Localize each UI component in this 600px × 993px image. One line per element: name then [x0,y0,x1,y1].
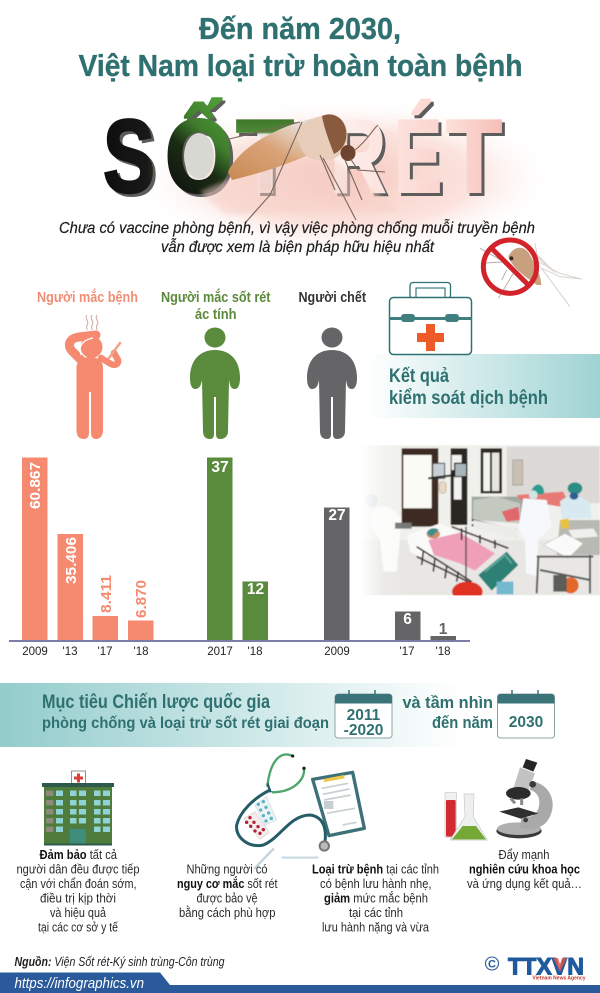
bar chart: Người mắc bệnh: 8.411 [98,575,115,613]
band: national strategy [0,683,460,747]
text: column 1: điều trị kịp thời [40,892,116,906]
text: column 4: và ứng dụng kết quả… [467,877,582,891]
text: column 2: Những người có [186,862,268,876]
hero word: SỐT RÉT: T [446,99,502,215]
icon: stethoscope, pills and clipboard [237,754,364,869]
source line: Nguồn: Viện Sốt rét-Ký sinh trùng-Côn trùng [14,954,225,969]
text: column 4: Đẩy mạnh [498,848,550,862]
axis labels: 2009 [324,646,350,658]
title [78,11,522,83]
bar chart: Người chết [324,507,456,640]
column label: Người mắc sốt rét ác tính [161,288,271,323]
heading: Kết quả kiểm soát dịch bệnh: kiểm soát dịch bệnh [389,388,548,409]
text: column 2: nguy cơ mắc sốt rét [177,876,278,891]
text: column 3: có bệnh lưu hành nhẹ, [320,877,432,891]
icon: calendar 2030: 2030 [509,714,543,731]
text: column 2: bằng cách phù hợp [179,905,276,920]
text: và tầm nhìn đến năm: đến năm [432,713,493,732]
axis labels: '17 [98,646,112,658]
bar chart: Người mắc sốt rét ác tính: 37 [211,459,229,476]
mosquito [200,114,400,222]
subtitle: Chưa có vaccine phòng bệnh, vì vậy việc phòng chống muỗi truyền bệnh [59,218,535,237]
bar chart: Người mắc bệnh: 35.406 [63,537,80,584]
text: và tầm nhìn đến năm: và tầm nhìn [402,693,493,712]
title: Việt Nam loại trừ hoàn toàn bệnh [78,48,522,83]
text: column 1: Đảm bảo tất cả [40,848,117,862]
hero word: SỐT RÉT [103,99,505,218]
axis labels: 2009 [22,646,48,658]
bar chart: Người chết: 27 [328,507,346,524]
icon: feverish person [69,315,120,439]
text: column 1: người dân đều được tiếp [16,862,140,876]
logo: TTXVN: Vietnam News Agency [532,976,586,982]
text: column 1: và hiệu quả [50,906,106,920]
axis labels: '13 [62,646,78,658]
hero word: SỐT RÉT: R [333,102,389,218]
hero word: SỐT RÉT: T [239,102,297,218]
bar chart: Người mắc bệnh [22,458,154,640]
photo: hospital ward [360,445,600,602]
icon: hospital [42,771,114,846]
text: column 3 [312,862,439,934]
bar chart: Người mắc sốt rét ác tính: 12 [247,581,264,598]
axis labels: '18 [134,646,148,658]
icon: no mosquito [480,240,582,307]
text: column 4: nghiên cứu khoa học [469,862,580,876]
subtitle: vẫn được xem là biện pháp hữu hiệu nhất [161,237,435,256]
column label: Người mắc sốt rét ác tính: ác tính [195,307,236,323]
text: column 3: giảm mức mắc bệnh [324,890,428,906]
subtitle [59,218,535,256]
axis labels [22,646,450,658]
hero word: SỐT RÉT: É [394,99,442,215]
column label: Người mắc sốt rét ác tính: Người mắc sốt rét [161,288,271,306]
hero word: SỐT RÉT: R [330,99,386,215]
hero word: SỐT RÉT: S [106,102,158,218]
hero word: SỐT RÉT: Ố [165,99,233,215]
text: và tầm nhìn đến năm [402,693,493,732]
heading: Kết quả kiểm soát dịch bệnh: Kết quả [389,366,449,387]
axis labels: '18 [436,646,450,658]
icon: medical kit [390,282,472,354]
icon: calendar 2030 [498,690,554,738]
text: column 4 [467,848,582,891]
text: column 1 [16,848,140,934]
logo: TTXVN: C [488,958,496,970]
band: results heading background [367,354,600,418]
heading: national strategy: phòng chống và loại trừ sốt rét giai đoạn [42,715,329,732]
column label: Người chết: Người chết [298,290,366,306]
icon: green person [190,328,240,439]
heading: national strategy: Mục tiêu Chiến lược quốc gia [42,692,270,713]
bar chart: Người mắc bệnh: 60.867 [27,462,44,509]
bar chart: Người chết: 1 [439,621,448,638]
logo: TTXVN: TTXVN [508,954,584,980]
axis labels: '17 [400,646,414,658]
icon: calendar 2011-2020: -2020 [344,722,383,739]
text: column 3: lưu hành nặng và vừa [322,920,429,934]
text: column 2 [177,862,278,920]
bar chart: Người mắc sốt rét ác tính [207,458,268,640]
hero: skin background glow [130,98,560,258]
text: column 3: tại các tỉnh [349,906,403,920]
bar chart: Người chết: 6 [403,611,412,628]
hero word: SỐT RÉT: T [236,99,294,215]
text: column 2: được bảo vệ [196,892,258,906]
hero word: SỐT RÉT: É [397,102,445,218]
heading: Kết quả kiểm soát dịch bệnh [389,366,548,409]
text: column 3: Loại trừ bệnh tại các tỉnh [312,862,439,876]
counter of the letter O [184,133,214,179]
heading: national strategy [42,692,329,732]
chart axis [9,640,470,642]
hero word: SỐT RÉT: Ố [168,102,236,218]
hero word: SỐT RÉT: S [103,99,155,215]
axis labels: '18 [248,646,262,658]
title: Đến năm 2030, [199,11,401,46]
hero word: SỐT RÉT: T [449,102,505,218]
icon: calendar 2011-2020 [335,690,392,739]
footer bar: https://infographics.vn [14,976,144,992]
icon: grey person [307,328,357,439]
icon: calendar 2011-2020: 2011 [347,707,381,724]
text: column 1: tại các cơ sở y tế [38,920,118,934]
bar chart: Người mắc bệnh: 6.870 [133,580,150,618]
icon: laboratory and microscope [445,759,553,840]
footer bar [0,972,600,993]
column label: Người mắc bệnh: Người mắc bệnh [37,288,138,306]
axis labels: 2017 [207,646,233,658]
text: column 1: cận với chẩn đoán sớm, [20,877,136,891]
